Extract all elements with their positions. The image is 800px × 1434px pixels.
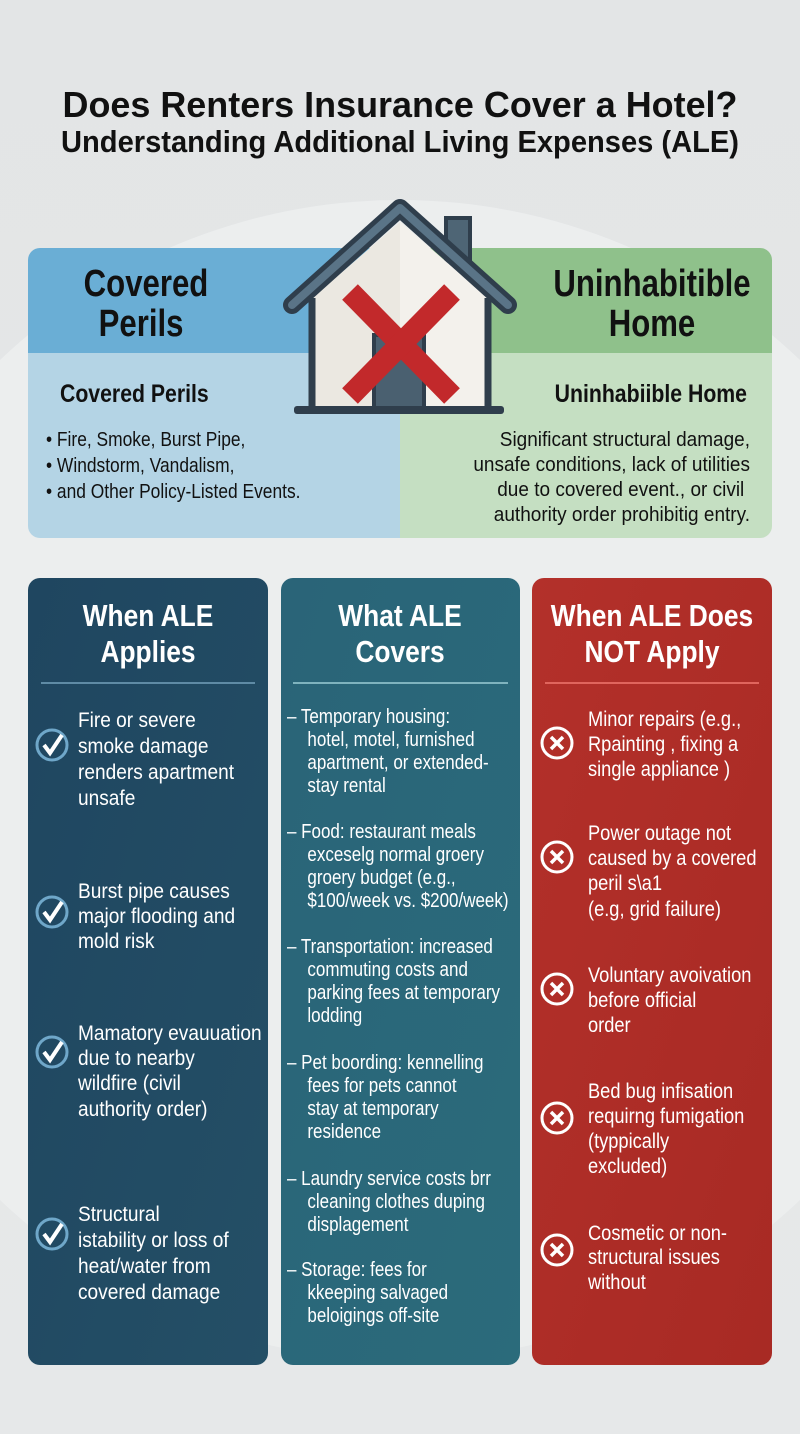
- heading: NOT Apply: [584, 635, 720, 670]
- text: uninhabitable description: authority order prohibitig entry.: [494, 504, 750, 526]
- items: excluded): [588, 1155, 667, 1178]
- items: istability or loss of: [78, 1229, 229, 1252]
- items: Burst pipe causes: [78, 880, 230, 903]
- items: without: [587, 1271, 646, 1294]
- items: Power outage not: [588, 822, 732, 845]
- title: [61, 84, 739, 159]
- icon: house with red X: [292, 208, 508, 414]
- icons: x circles: [542, 728, 572, 1265]
- items: Structural: [78, 1203, 160, 1226]
- items: Fire or severe: [78, 709, 196, 732]
- items: unsafe: [78, 787, 135, 810]
- text: uninhabitable description: [473, 429, 750, 526]
- text: uninhabitable description: Significant structural damage,: [500, 429, 750, 451]
- items: exceselg normal groery: [307, 843, 485, 865]
- items: due to nearby: [78, 1047, 195, 1070]
- items: single appliance ): [588, 758, 730, 781]
- items: lodding: [307, 1004, 362, 1026]
- list: covered perils: • and Other Policy-Listed Events.: [46, 480, 301, 502]
- items: [77, 709, 262, 1304]
- items: [287, 705, 509, 1326]
- items: Rpainting , fixing a: [588, 733, 738, 756]
- list: covered perils: [46, 428, 301, 502]
- items: $100/week vs. $200/week): [307, 889, 509, 911]
- items: parking fees at temporary: [307, 981, 501, 1003]
- items: commuting costs and: [307, 958, 468, 980]
- items: heat/water from: [78, 1255, 211, 1278]
- items: peril s\a1: [588, 872, 662, 895]
- heading: covered perils: Perils: [99, 303, 184, 345]
- items: cleaning clothes duping: [307, 1190, 485, 1212]
- heading: covered perils: Covered: [84, 263, 208, 305]
- items: kkeeping salvaged: [307, 1281, 448, 1303]
- heading: [551, 599, 753, 670]
- title: Understanding Additional Living Expenses (ALE): [61, 124, 739, 159]
- heading: uninhabitable home: [555, 268, 750, 336]
- items: stay at temporary: [307, 1097, 439, 1119]
- heading: When ALE Does: [551, 599, 753, 634]
- panel: when ALE does NOT apply: [532, 578, 772, 1365]
- items: smoke damage: [78, 735, 209, 758]
- list: covered perils: • Windstorm, Vandalism,: [46, 454, 234, 476]
- items: major flooding and: [78, 905, 235, 928]
- title: Does Renters Insurance Cover a Hotel?: [62, 84, 738, 125]
- items: wildfire (civil: [77, 1072, 181, 1095]
- heading: uninhabitable home: Home: [609, 303, 695, 345]
- panel: what ALE covers: [281, 578, 520, 1365]
- items: authority order): [78, 1098, 207, 1121]
- items: displagement: [307, 1213, 409, 1235]
- items: caused by a covered: [588, 847, 757, 870]
- items: beloigings off-site: [307, 1304, 439, 1326]
- items: Minor repairs (e.g.,: [588, 708, 741, 731]
- items: Bed bug infisation: [588, 1080, 733, 1103]
- heading: [83, 599, 213, 670]
- subheading: covered perils: Covered Perils: [60, 379, 209, 407]
- text: uninhabitable description: due to covered event., or civil: [497, 479, 744, 501]
- panel: covered perils / uninhabitable home: [28, 248, 772, 538]
- icons: check circles: [37, 730, 67, 1249]
- items: hotel, motel, furnished: [307, 728, 475, 750]
- items: Mamatory evauuation: [78, 1022, 262, 1045]
- items: stay rental: [307, 774, 386, 796]
- items: renders apartment: [78, 761, 234, 784]
- subheading: uninhabitable home: Uninhabiible Home: [555, 379, 747, 407]
- items: structural issues: [588, 1246, 720, 1269]
- items: requirng fumigation: [588, 1105, 744, 1128]
- items: groery budget (e.g.,: [307, 866, 456, 888]
- items: – Pet boording: kennelling: [287, 1051, 483, 1073]
- items: (e.g, grid failure): [588, 898, 721, 921]
- items: Cosmetic or non-: [588, 1222, 727, 1245]
- list: covered perils: • Fire, Smoke, Burst Pipe,: [46, 428, 245, 450]
- heading: covered perils: [84, 268, 206, 336]
- items: apartment, or extended-: [307, 751, 489, 773]
- items: covered damage: [78, 1281, 220, 1304]
- items: [587, 708, 757, 1294]
- items: fees for pets cannot: [307, 1074, 457, 1096]
- heading: uninhabitable home: Uninhabitible: [553, 263, 751, 305]
- items: – Laundry service costs brr: [287, 1167, 491, 1189]
- items: – Transportation: increased: [287, 935, 493, 957]
- heading: Applies: [100, 635, 196, 670]
- items: – Storage: fees for: [287, 1258, 427, 1280]
- items: mold risk: [78, 930, 155, 953]
- items: Voluntary avoivation: [588, 964, 751, 987]
- items: – Food: restaurant meals: [287, 820, 476, 842]
- heading: [338, 599, 462, 670]
- items: before official: [588, 989, 696, 1012]
- items: (typpically: [588, 1130, 669, 1153]
- text: uninhabitable description: unsafe conditions, lack of utilities: [473, 454, 750, 476]
- items: order: [588, 1014, 631, 1037]
- heading: What ALE: [338, 599, 462, 634]
- items: residence: [307, 1120, 381, 1142]
- panel: when ALE applies: [28, 578, 268, 1365]
- items: – Temporary housing:: [287, 705, 450, 727]
- heading: When ALE: [83, 599, 213, 634]
- heading: Covers: [355, 635, 445, 670]
